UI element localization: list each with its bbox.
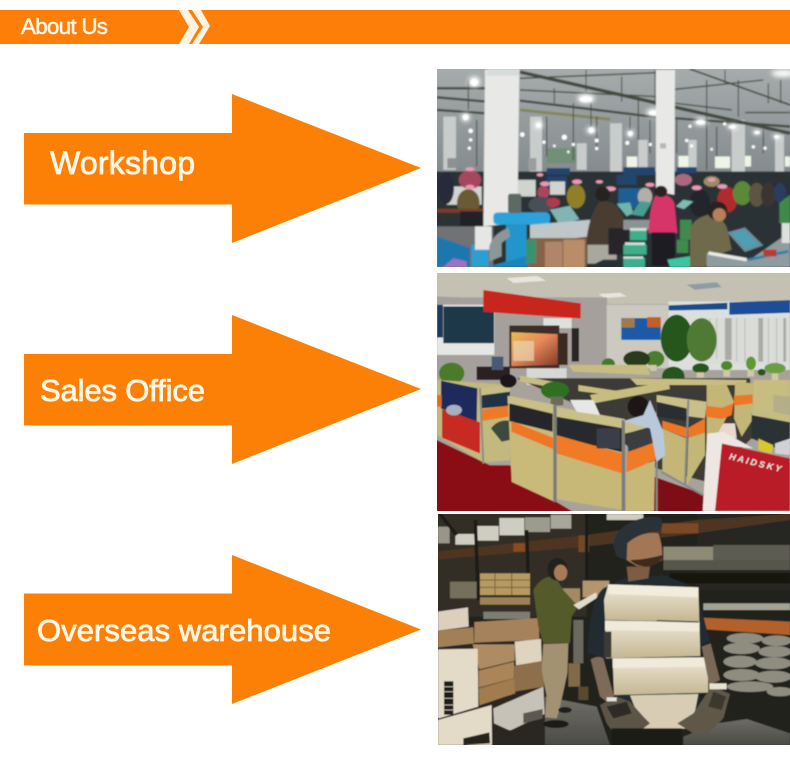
photo: sales office: HAIDSKY: [728, 451, 783, 474]
label: Sales Office: Sales Office: [40, 373, 205, 408]
photo: workshop: [437, 69, 790, 267]
header banner: [0, 10, 790, 44]
heading: About Us: About Us: [21, 14, 108, 39]
label: Overseas warehouse: Overseas warehouse: [37, 613, 331, 648]
arrow: Workshop: [24, 94, 421, 243]
arrow: Overseas warehouse: [24, 555, 421, 704]
label: Workshop: Workshop: [50, 145, 195, 181]
photo: sales office: [437, 273, 790, 511]
arrow: Sales Office: [24, 315, 421, 464]
icon: double chevron: [179, 10, 210, 44]
photo: overseas warehouse: [438, 514, 790, 745]
